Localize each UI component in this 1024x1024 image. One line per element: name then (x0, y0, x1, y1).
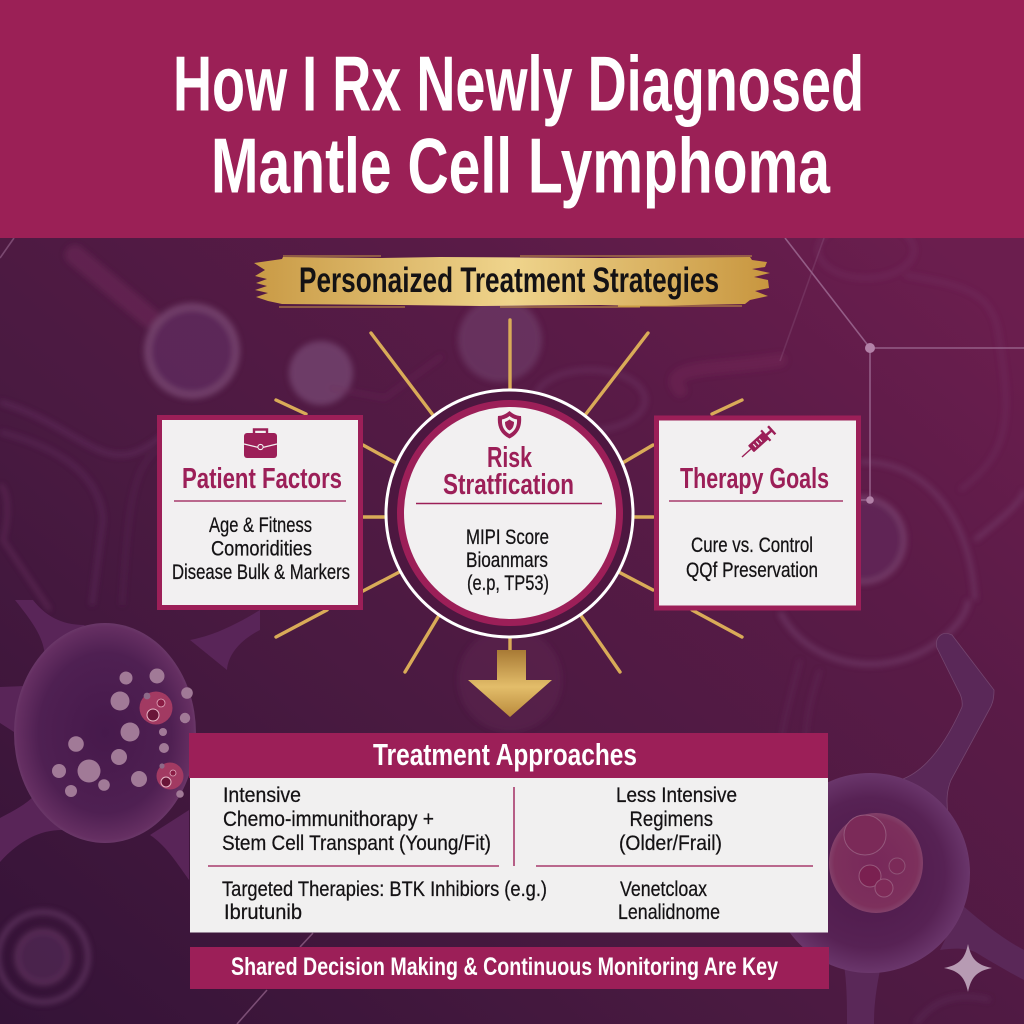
text: risk factors list: (e.p, TP53) (467, 572, 549, 595)
text: risk factors list: MIPI Score (466, 526, 549, 549)
cell illustration: right cell (770, 633, 1024, 1024)
body background (190, 778, 828, 932)
text: patient factors list (172, 514, 350, 584)
gold rays (276, 320, 742, 672)
cell granules (52, 668, 193, 798)
text: intensive: Chemo-immunithorapy + (223, 808, 434, 831)
sparkle icon (944, 944, 992, 992)
heading: risk stratification (443, 442, 574, 501)
footer callout (190, 947, 829, 989)
text: therapy goals list: Cure vs. Control (691, 534, 813, 557)
text: less intensive: Less Intensive (616, 784, 737, 807)
cell nucleus (829, 813, 923, 913)
text: less intensive: (Older/Frail) (619, 832, 722, 855)
title (173, 40, 864, 210)
text: risk factors list (466, 526, 549, 595)
gold banner: personalized treatment strategies (254, 256, 770, 307)
text: venetoclax and lenalidomide: Venetcloax (620, 878, 707, 901)
arrow: down to treatment approaches (468, 650, 552, 717)
gold banner: personalized treatment strategies: Personaized Treatment Strategies (299, 261, 719, 300)
panel: treatment approaches (189, 733, 828, 932)
text: intensive: Stem Cell Transpant (Young/Fit) (222, 832, 491, 855)
heading: risk stratification: Risk (487, 442, 533, 474)
red organelles (140, 692, 172, 724)
cell illustration: left cell (0, 600, 260, 880)
header band (0, 0, 1024, 238)
text: targeted therapies (222, 878, 547, 924)
footer callout: Shared Decision Making & Continuous Monitoring Are Key (231, 953, 778, 981)
panel: therapy goals (656, 418, 858, 608)
panel: patient factors (160, 418, 360, 608)
text: intensive (222, 784, 491, 855)
text: risk factors list: Bioanmars (466, 549, 548, 572)
heading: patient factors: Patient Factors (182, 463, 342, 495)
background (0, 222, 1024, 1024)
text: less intensive: Regimens (630, 808, 713, 831)
icon: syringe (737, 425, 776, 462)
icon: briefcase (244, 430, 277, 458)
network lines (0, 238, 1024, 1024)
text: venetoclax and lenalidomide (618, 878, 720, 924)
text: less intensive (616, 784, 737, 855)
text: intensive: Intensive (223, 784, 301, 807)
heading bar: Treatment Approaches (373, 737, 637, 772)
heading bar (189, 733, 828, 778)
text: therapy goals list: QQf Preservation (686, 559, 818, 582)
text: therapy goals list (686, 534, 818, 582)
heading: therapy goals: Therapy Goals (680, 463, 829, 495)
text: venetoclax and lenalidomide: Lenalidnome (618, 901, 720, 924)
blurred background cells (0, 222, 1024, 1024)
panel: risk stratification circle (386, 390, 633, 637)
text: patient factors list: Comoridities (211, 538, 312, 560)
text: targeted therapies: Ibrutunib (224, 901, 302, 924)
text: patient factors list: Age & Fitness (209, 514, 312, 537)
text: targeted therapies: Targeted Therapies: BTK Inhibiors (e.g.) (222, 878, 547, 901)
text: patient factors list: Disease Bulk & Markers (172, 561, 350, 584)
icon: shield (498, 411, 521, 438)
heading: risk stratification: Stratfication (443, 469, 574, 501)
